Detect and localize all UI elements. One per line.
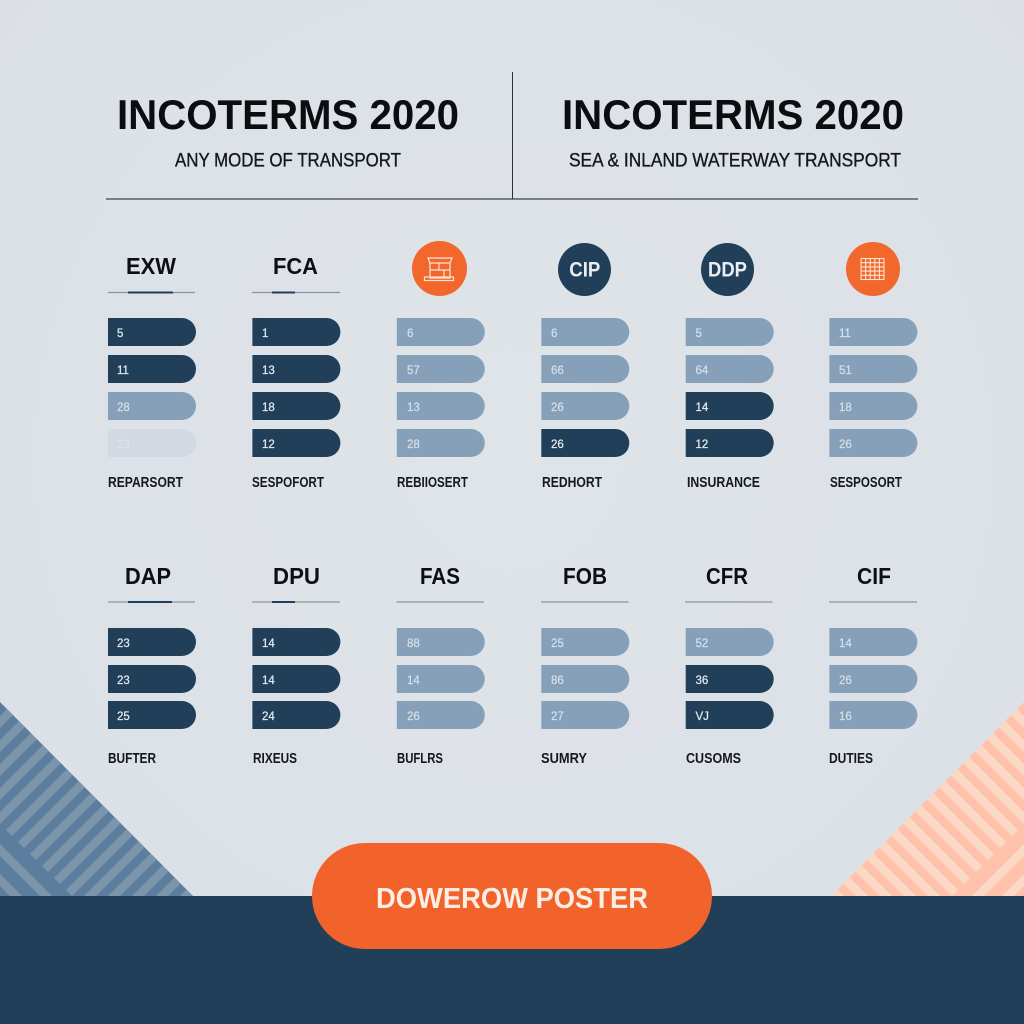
panel: warehouse column: [397, 241, 485, 491]
panel: CIF: [829, 563, 917, 767]
bars: DPU: 24: [262, 711, 275, 723]
label: DDP: INSURANCE: [687, 475, 760, 491]
bars: DDP: 14: [696, 402, 709, 414]
bars: FOB: 86: [551, 675, 564, 687]
bars: warehouse column: [397, 318, 485, 457]
bars: DPU: [252, 628, 340, 729]
bars: CIF: [829, 628, 917, 729]
heading: CFR: CFR: [706, 563, 748, 589]
title: sea and inland: INCOTERMS 2020: [562, 91, 904, 138]
bars: CIP: 66: [551, 365, 564, 377]
bars: DDP: 12: [696, 439, 708, 451]
panel: DAP: [108, 563, 196, 767]
bars: DAP: 25: [117, 711, 130, 723]
striped triangle: left corner: [0, 702, 193, 896]
bars: CIF: 26: [839, 675, 852, 687]
bars: FOB: 25: [551, 638, 564, 650]
icon: warehouse: [412, 241, 467, 296]
underline: DPU: [252, 601, 340, 603]
bars: FCA: 1: [262, 328, 268, 340]
bars: CFR: 36: [696, 675, 708, 687]
bars: DDP: 5: [696, 328, 702, 340]
underline: EXW: [108, 292, 195, 294]
bars: CIP: 6: [551, 328, 557, 340]
bars: FAS: 88: [407, 638, 420, 650]
bars: EXW: 11: [117, 365, 129, 377]
panel: FCA: [252, 253, 340, 491]
heading: CIF: CIF: [857, 563, 891, 589]
bars: EXW: [108, 318, 196, 457]
title: any mode: INCOTERMS 2020: [117, 91, 459, 138]
bars: grid column: [829, 318, 917, 457]
underline: CIF: [829, 601, 917, 603]
bars: FOB: 27: [551, 711, 564, 723]
bars: CIP: 26: [551, 439, 564, 451]
header lines: [106, 72, 918, 199]
label: EXW: REPARSORT: [108, 475, 183, 491]
label: CIP: REDHORT: [542, 475, 602, 491]
bars: DPU: 14: [262, 638, 275, 650]
heading: EXW: EXW: [126, 253, 176, 279]
bars: FAS: 26: [407, 711, 420, 723]
bars: FCA: 12: [262, 439, 275, 451]
bars: FOB: [541, 628, 629, 729]
bars: grid column: 26: [839, 439, 852, 451]
bars: DAP: 23: [117, 638, 130, 650]
panel: CIP: [541, 243, 629, 491]
heading: DAP: DAP: [125, 563, 171, 589]
label: FOB: SUMRY: [541, 751, 587, 767]
bars: CIF: 16: [839, 711, 852, 723]
bars: warehouse column: 13: [407, 402, 420, 414]
footer band: [0, 896, 1024, 1024]
badge: DDP: DDP: [708, 258, 747, 281]
panel: grid column: [829, 242, 917, 491]
underline: DAP: [108, 601, 195, 603]
underline: FAS: [396, 601, 484, 603]
bars: CFR: 52: [696, 638, 708, 650]
bars: DAP: [108, 628, 196, 729]
label: FAS: BUFLRS: [397, 751, 443, 767]
bars: FCA: 13: [262, 365, 275, 377]
badge: DDP: [701, 243, 754, 296]
heading: FCA: FCA: [273, 253, 318, 279]
bars: FAS: [397, 628, 485, 729]
subtitle: any mode: ANY MODE OF TRANSPORT: [175, 150, 401, 172]
bars: CFR: [686, 628, 774, 729]
label: DAP: BUFTER: [108, 751, 156, 767]
panel: FAS: [396, 563, 485, 767]
badge: CIP: CIP: [569, 258, 600, 281]
label: DPU: RIXEUS: [253, 751, 297, 767]
heading: FAS: FAS: [420, 563, 460, 589]
bars: DPU: 14: [262, 675, 275, 687]
label: FCA: SESPOFORT: [252, 475, 324, 491]
label: CIF: DUTIES: [829, 751, 873, 767]
underline: CFR: [685, 601, 772, 603]
bars: CIF: 14: [839, 638, 852, 650]
bars: CIP: [541, 318, 629, 457]
heading: FOB: FOB: [563, 563, 607, 589]
bars: grid column: 18: [839, 402, 852, 414]
subtitle: sea and inland: SEA & INLAND WATERWAY TRANSPORT: [569, 150, 901, 172]
label: CFR: CUSOMS: [686, 751, 741, 767]
button: download poster: DOWEROW POSTER: [376, 883, 648, 915]
bars: CFR: VJ: [696, 711, 709, 723]
underline: FCA: [252, 292, 340, 294]
bars: FAS: 14: [407, 675, 420, 687]
panel: DPU: [252, 563, 340, 767]
label: warehouse column: REBIIOSERT: [397, 475, 468, 491]
heading: DPU: DPU: [273, 563, 320, 589]
icon: grid table: [846, 242, 900, 296]
bars: warehouse column: 57: [407, 365, 420, 377]
panel: CFR: [685, 563, 774, 767]
bars: EXW: 23: [117, 439, 130, 451]
bars: grid column: 11: [839, 328, 851, 340]
button: download poster: [312, 843, 712, 949]
bars: warehouse column: 28: [407, 439, 420, 451]
bars: CIP: 26: [551, 402, 564, 414]
underline: FOB: [541, 601, 628, 603]
bars: FCA: 18: [262, 402, 275, 414]
panel: EXW: [108, 253, 196, 491]
bars: EXW: 5: [117, 328, 123, 340]
bars: grid column: 51: [839, 365, 852, 377]
bars: EXW: 28: [117, 402, 130, 414]
badge: CIP: [558, 243, 611, 296]
panel: DDP: [686, 243, 774, 491]
bars: DDP: 64: [696, 365, 709, 377]
striped triangle: right corner: [831, 702, 1024, 896]
bars: warehouse column: 6: [407, 328, 413, 340]
panel: FOB: [541, 563, 629, 767]
bars: DAP: 23: [117, 675, 130, 687]
bars: DDP: [686, 318, 774, 457]
label: grid column: SESPOSORT: [830, 475, 902, 491]
bars: FCA: [252, 318, 340, 457]
